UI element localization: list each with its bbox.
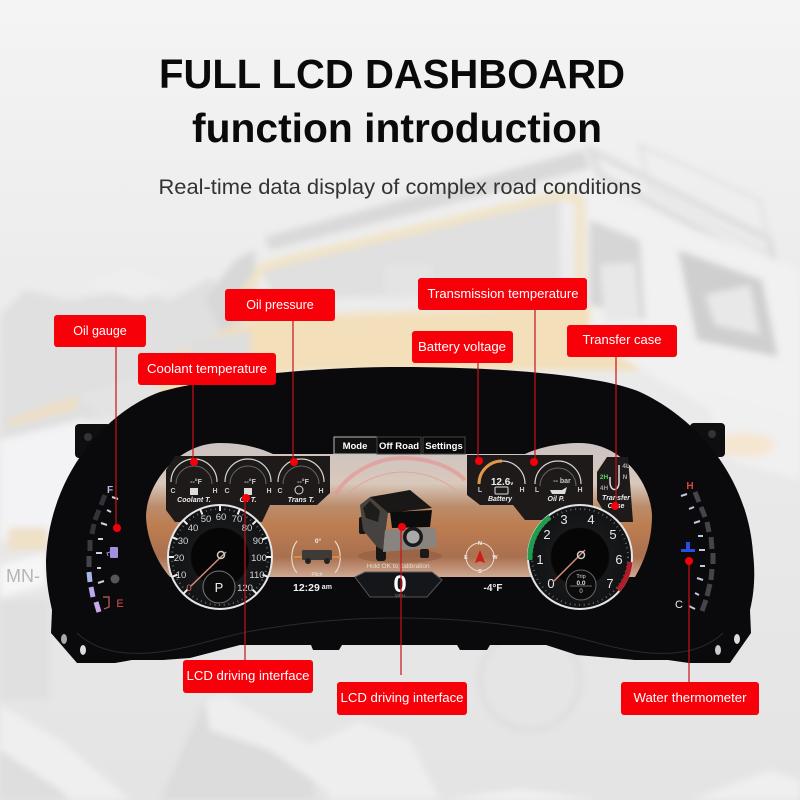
callout: transmission temperature: Transmission temperature [428,287,579,301]
speedometer: 110 [249,570,265,581]
pitch arc overlay [335,458,465,497]
left gauge panel: Trans T. [288,497,314,504]
lcd screen [146,443,652,577]
temperature gauge: C [675,599,683,611]
callout: lcd driving interface center [337,523,467,715]
tachometer: 0 [579,589,583,595]
callout: lcd driving interface center: LCD driving interface [340,691,464,705]
speedometer: 0 [186,583,192,594]
transfer case panel: 4H [600,485,608,492]
clock: 12:29 [293,582,320,594]
left gauge panel: --°F [190,478,203,486]
speedometer: 40 [188,523,198,534]
clock: am [320,584,332,591]
callout: water thermometer [621,557,759,715]
tachometer: 5 [609,527,617,542]
left gauge panel: C [277,488,283,495]
background: faded off-road vehicle photo: MN- [6,566,40,586]
digital speed readout [355,571,442,598]
left gauge panel: H [318,488,324,495]
compass: E [464,555,468,561]
callout: oil gauge: Oil gauge [73,324,127,338]
housing [46,367,754,663]
pitch indicator: 0° [315,537,322,545]
tachometer: 4 [587,512,595,527]
transfer case panel: 4L [622,463,630,470]
callout: battery voltage [412,331,513,465]
subtitle: Real-time data display of complex road conditions [158,176,642,199]
left gauge panel: H [212,488,218,495]
speedometer: 50 [201,514,211,525]
tabs: Settings [425,441,463,452]
callout: oil gauge [54,315,146,532]
speedometer: P [215,580,223,595]
callout: coolant temperature [138,353,276,466]
tachometer: 7 [606,576,614,591]
tachometer: 3 [560,512,568,527]
tachometer: 0.0 [576,580,586,587]
center vehicle: Hold OK to calibration [366,563,430,570]
speedometer: 90 [253,536,263,547]
left gauge panel: H [266,488,272,495]
right gauge panel: Oil P. [548,496,565,503]
callout: lcd driving interface left [183,494,313,693]
left gauge panel: C [170,488,176,495]
speedometer: 10 [176,570,186,581]
left gauge panel: C [224,488,230,495]
transfer case panel: 2H [600,474,608,481]
title: FULL LCD DASHBOARD [159,51,625,97]
right gauge panel: H [519,487,525,494]
speedometer: 30 [178,536,188,547]
pitch indicator: Pitch [311,572,323,578]
center vehicle [358,490,442,570]
speedometer: 120 [237,583,253,594]
callout: oil pressure [225,289,335,466]
callout: water thermometer: Water thermometer [634,691,746,705]
callout: transfer case: Transfer case [582,333,662,347]
transfer case panel: Case [608,503,624,510]
callout: coolant temperature: Coolant temperature [147,362,267,376]
speedometer [168,505,272,609]
dashboard cluster [46,367,754,663]
tachometer: 2 [543,527,551,542]
right gauge panel: L [535,487,540,494]
tachometer: Trip [576,574,586,580]
outside temperature: -4°F [484,583,502,594]
temperature gauge [675,481,713,611]
title: function introduction [192,105,602,151]
tabs: Off Road [379,441,419,452]
left gauge panel [166,456,330,522]
callout: lcd driving interface left: LCD driving interface [186,669,310,683]
tabs: Mode [343,441,367,452]
right gauge panel: H [577,487,583,494]
left gauge panel: --°F [244,478,257,486]
right gauge panel: L [478,487,483,494]
temperature gauge: H [686,481,694,492]
callout: transfer case [567,325,677,510]
compass [464,541,498,575]
compass: N [478,541,482,547]
callout: transmission temperature [418,278,587,466]
speedometer: 80 [242,523,252,534]
fuel gauge: E [116,598,124,610]
tachometer: 0 [547,576,555,591]
tachometer [528,505,632,609]
compass: S [478,569,482,575]
transfer case panel: N [623,474,628,481]
right gauge panel: Battery [488,496,513,503]
left gauge panel: Coolant T. [177,497,211,504]
digital speed readout: MPH [395,593,405,598]
compass: W [492,555,498,561]
callout: oil pressure: Oil pressure [246,298,314,312]
tachometer: 6 [615,552,623,567]
left gauge panel: --°F [297,478,310,486]
pitch indicator [292,537,341,578]
title [159,51,625,151]
right gauge panel [467,455,593,520]
digital speed readout: 0 [393,571,407,598]
transfer case panel [597,457,633,522]
right gauge panel: 12.6v [491,477,513,488]
tabs [334,437,465,454]
tachometer: 1 [536,552,544,567]
fuel gauge: F [107,485,113,496]
speedometer: 100 [251,553,267,564]
speedometer: 70 [232,514,242,525]
callout: battery voltage: Battery voltage [418,340,506,354]
speedometer: 60 [216,512,226,523]
fuel gauge [89,485,124,612]
speedometer: 20 [174,553,184,564]
right gauge panel: -- bar [553,478,571,485]
transfer case panel: Transfer [602,495,631,502]
left gauge panel: Oil T. [240,497,257,504]
